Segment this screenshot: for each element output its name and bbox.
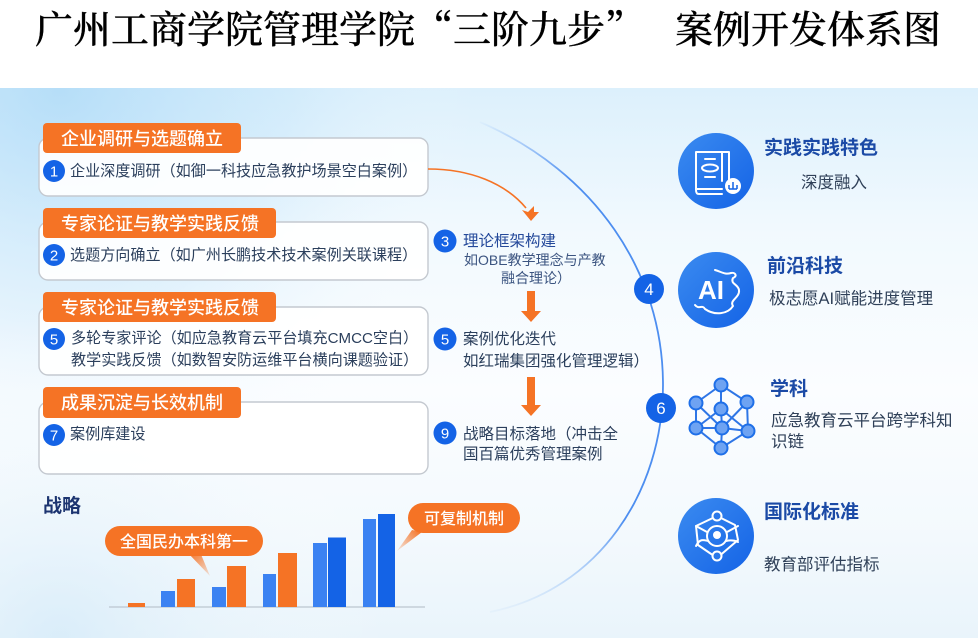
title: 案例开发体系图 — [675, 0, 941, 54]
step 5: 多轮专家评论（如应急教育云平台填充CMCC空白） — [71, 329, 418, 347]
step 7: 案例库建设 — [70, 425, 145, 443]
text: 实践实践特色: 深度融入 — [801, 173, 867, 192]
heading: 企业调研与选题确立 — [61, 129, 223, 149]
heading — [43, 123, 241, 153]
panel: 专家论证与教学实践反馈 (1) — [39, 208, 428, 280]
step 7 — [43, 424, 145, 446]
icon: international standard — [678, 498, 754, 574]
text: 前沿科技: 前沿科技 — [767, 255, 843, 277]
step 5 — [43, 328, 418, 369]
callout: 可复制机制 — [397, 503, 520, 551]
step 3: 融合理论） — [501, 270, 571, 286]
badge 6: 6 — [656, 399, 666, 418]
text: 学科 — [770, 377, 952, 451]
arrow: down 2 — [521, 377, 541, 416]
title — [35, 0, 941, 54]
step 5 iteration — [434, 328, 649, 370]
callout: 全国民办本科第一 — [105, 526, 263, 576]
strategy label: 战略 — [43, 495, 81, 517]
heading: 成果沉淀与长效机制 — [61, 393, 223, 413]
arrow: curved to step 3 — [428, 169, 539, 221]
panel: 专家论证与教学实践反馈 (2) — [39, 292, 428, 375]
callout: 可复制机制: 可复制机制 — [424, 510, 504, 528]
heading: 专家论证与教学实践反馈 — [61, 298, 259, 318]
step 2: 选题方向确立（如广州长鹏技术技术案例关联课程） — [70, 246, 417, 264]
step 5 iteration: 5 — [441, 332, 449, 348]
step 7: 7 — [50, 428, 58, 444]
step 3 — [434, 230, 606, 286]
text: 前沿科技 — [767, 255, 933, 308]
text: 国际化标准 — [764, 501, 880, 574]
callout: 全国民办本科第一: 全国民办本科第一 — [120, 532, 248, 551]
title: 广州工商学院管理学院“三阶九步” — [35, 0, 643, 54]
step 9: 国百篇优秀管理案例 — [463, 445, 603, 463]
arrow: down 1 — [521, 291, 541, 322]
step 9 — [434, 422, 619, 463]
badge 4: 4 — [644, 280, 654, 299]
text: 学科: 应急教育云平台跨学科知 — [771, 411, 952, 430]
text: 前沿科技: 极志愿AI赋能进度管理 — [769, 289, 933, 308]
text: 实践实践特色: 实践实践特色 — [764, 136, 878, 159]
icon: book — [678, 133, 754, 209]
panel: 企业调研与选题确立 — [39, 123, 428, 196]
step 2: 2 — [50, 248, 58, 264]
step 5: 5 — [50, 332, 58, 348]
text: 实践实践特色 — [764, 136, 878, 192]
step 5 iteration: 案例优化迭代 — [463, 330, 557, 348]
step 3: 3 — [441, 234, 449, 250]
badge 6 — [646, 393, 676, 423]
icon: AI — [678, 252, 754, 328]
step 5: 教学实践反馈（如数智安防运维平台横向课题验证） — [71, 351, 418, 369]
step 3: 如OBE教学理念与产教 — [464, 252, 606, 268]
panel: 成果沉淀与长效机制 — [39, 387, 428, 474]
connecting blue arc — [480, 122, 663, 612]
heading: 专家论证与教学实践反馈 — [61, 214, 259, 234]
heading — [43, 208, 276, 238]
step 9: 战略目标落地（冲击全 — [463, 425, 619, 443]
icon: knowledge network — [690, 378, 754, 454]
text: 学科: 学科 — [770, 377, 808, 400]
text: 国际化标准: 国际化标准 — [764, 501, 859, 523]
text: 学科: 识链 — [771, 432, 804, 451]
step 3: 理论框架构建 — [463, 232, 556, 250]
text: 国际化标准: 教育部评估指标 — [764, 555, 880, 574]
step 5 iteration: 如红瑞集团强化管理逻辑） — [463, 352, 649, 370]
heading — [43, 387, 241, 418]
icon: AI: AI — [698, 275, 724, 305]
step 1: 1 — [50, 164, 58, 180]
step 1: 企业深度调研（如御一科技应急教护场景空白案例） — [70, 162, 417, 180]
step 9: 9 — [441, 426, 449, 442]
badge 4 — [634, 274, 664, 304]
heading — [43, 292, 276, 322]
bar chart — [109, 514, 425, 607]
